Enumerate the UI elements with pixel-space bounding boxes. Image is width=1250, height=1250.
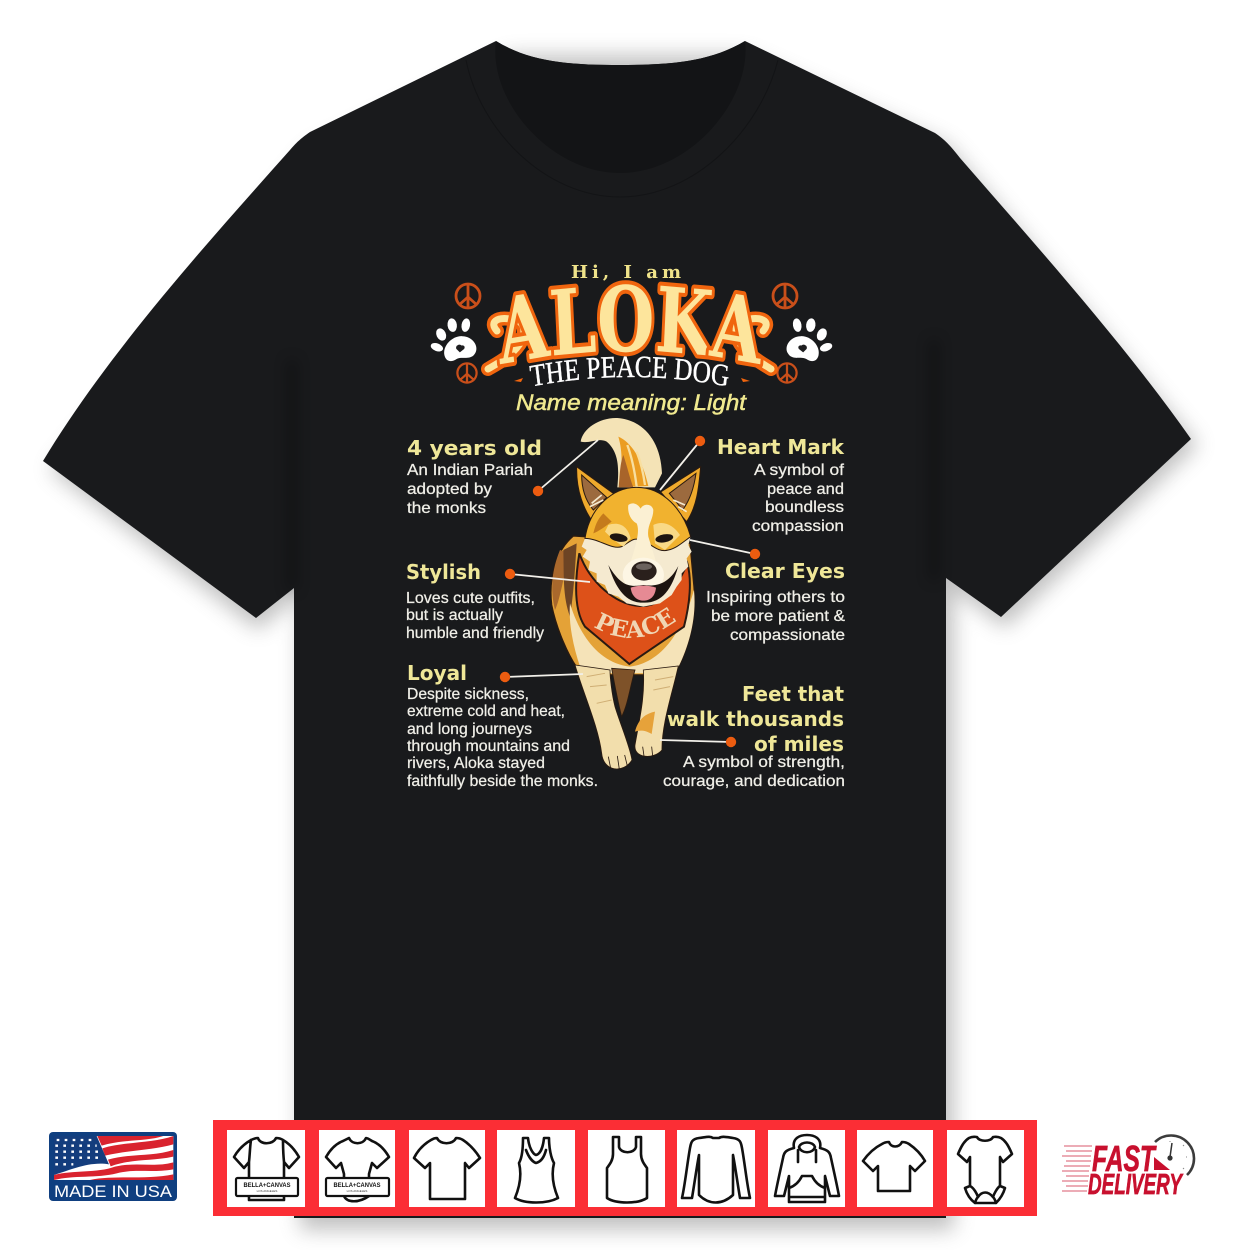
bandana lettering: PEACE [594,607,676,638]
text block: Heart Mark: Heart Mark [717,435,845,459]
heading: Hi, I am: Hi, I am [571,262,681,283]
text block: Feet that walk thousands of miles: Feet that [742,682,844,706]
badge: made in USA: MADE IN USA [54,1182,173,1201]
dog tail [581,418,662,487]
t-shirt collar interior [495,41,746,173]
text block: Loyal [407,661,598,790]
dog head [582,487,692,607]
text block: Feet that walk thousands of miles: walk thousands [667,707,844,731]
text block: 4 years old: the monks [407,500,486,517]
text block: Loyal: rivers, Aloka stayed [407,755,545,772]
tile: Bella Canvas women's tee: LOS ANGELES [347,1189,367,1193]
tile: Bella Canvas women's tee [319,1130,395,1207]
title: ALOKA: ALOKA [496,280,764,368]
badge: fast delivery: DELIVERY [1088,1169,1184,1201]
dog eyes [609,532,674,544]
text block: Clear Eyes: compassionate [730,627,845,644]
dog bandana [576,553,690,664]
text block: Clear Eyes: Clear Eyes [725,559,845,583]
text block: Loyal: through mountains and [407,738,570,755]
text block: Heart Mark: compassion [752,518,844,535]
icon: peace signs [456,284,797,383]
badge: made in USA [49,1132,177,1201]
subtitle: THE PEACE DOG: THE PEACE DOG [529,356,729,386]
text block: Stylish: Stylish [406,560,481,584]
text block: Feet that walk thousands of miles: courage, and dedication [663,773,845,790]
text block: Heart Mark: peace and [767,481,844,498]
tile: Bella Canvas tee [227,1130,305,1207]
dog ears [577,467,701,525]
text block: Stylish: but is actually [406,607,503,624]
icon: paw prints [430,318,833,361]
badge: fast delivery [1062,1135,1194,1201]
tile: racerback tank [497,1130,575,1207]
text block: Heart Mark: A symbol of [754,462,845,479]
text block: Loyal: Loyal [407,661,467,685]
text block: 4 years old: An Indian Pariah [407,462,533,479]
tile: Bella Canvas women's tee: BELLA+CANVAS [334,1183,380,1189]
text block: Stylish [406,560,544,642]
dog muzzle and mouth [608,558,678,603]
tile: long sleeve [677,1130,755,1207]
badge: fast delivery: FAST [1092,1138,1157,1179]
tile: Bella Canvas tee: BELLA+CANVAS [244,1183,290,1189]
dog body [551,536,695,675]
text block: Feet that walk thousands of miles: of miles [754,732,844,756]
text block: Feet that walk thousands of miles: A symbol of strength, [683,754,845,771]
text block: Stylish: Loves cute outfits, [406,590,535,607]
text block: Heart Mark: boundless [765,499,844,516]
text block: 4 years old: adopted by [407,481,492,498]
text block: Loyal: faithfully beside the monks. [407,773,598,790]
product strip [213,1120,1037,1216]
subtitle dashes [514,378,750,382]
text block: Loyal: extreme cold and heat, [407,703,565,720]
title flourishes [488,319,771,369]
tile: crop tee [857,1130,933,1207]
text block: Loyal: and long journeys [407,721,532,738]
tile: classic tee [409,1130,485,1207]
tile: hoodie [768,1130,845,1207]
tile: Bella Canvas tee: LOS ANGELES [257,1189,277,1193]
text block: 4 years old: 4 years old [407,436,542,460]
text block: Stylish: humble and friendly [406,625,544,642]
gauge [1154,1135,1194,1175]
callout lines and dots [500,436,760,747]
text block: Clear Eyes: Inspiring others to [706,589,845,606]
text block: Clear Eyes: be more patient & [711,608,845,625]
text block: 4 years old [407,436,542,517]
text block: Feet that walk thousands of miles [663,682,845,790]
text block: Clear Eyes [706,559,845,644]
dog legs [575,665,678,769]
tile: baby onesie [947,1130,1024,1207]
flag [54,1136,173,1180]
speed lines [1062,1146,1092,1191]
text block: Loyal: Despite sickness, [407,686,529,703]
text: name meaning: Name meaning: Light [516,390,747,415]
tile: tank top [588,1130,665,1207]
text block: Heart Mark [717,435,845,535]
illustration: dog [550,418,701,770]
